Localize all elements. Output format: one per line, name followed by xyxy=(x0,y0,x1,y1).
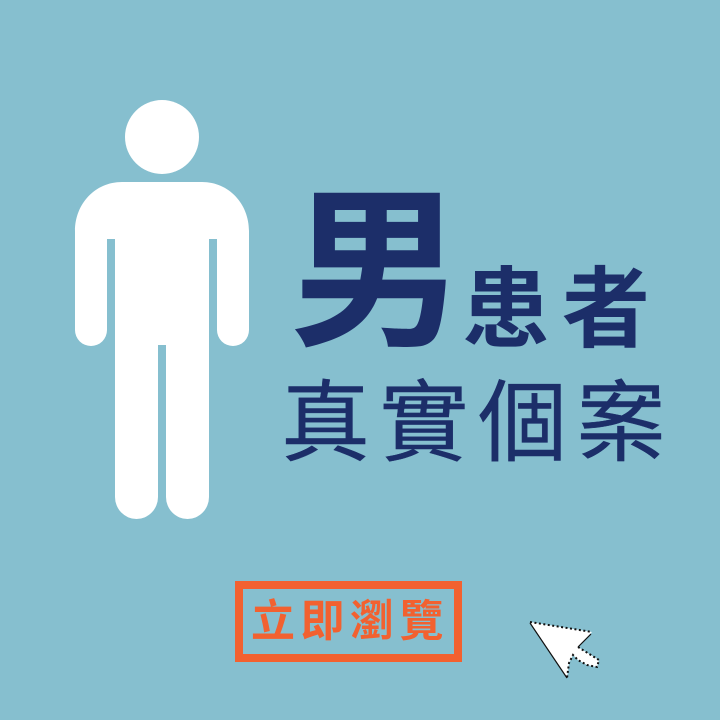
subheading: real cases: 真實個案 xyxy=(281,373,675,473)
heading: patient: 患者 xyxy=(462,260,662,359)
button label: 立即瀏覽 xyxy=(251,597,449,646)
heading: large character: 男 xyxy=(290,174,464,369)
icon: mouse cursor xyxy=(530,621,600,678)
button: browse now xyxy=(235,581,462,662)
